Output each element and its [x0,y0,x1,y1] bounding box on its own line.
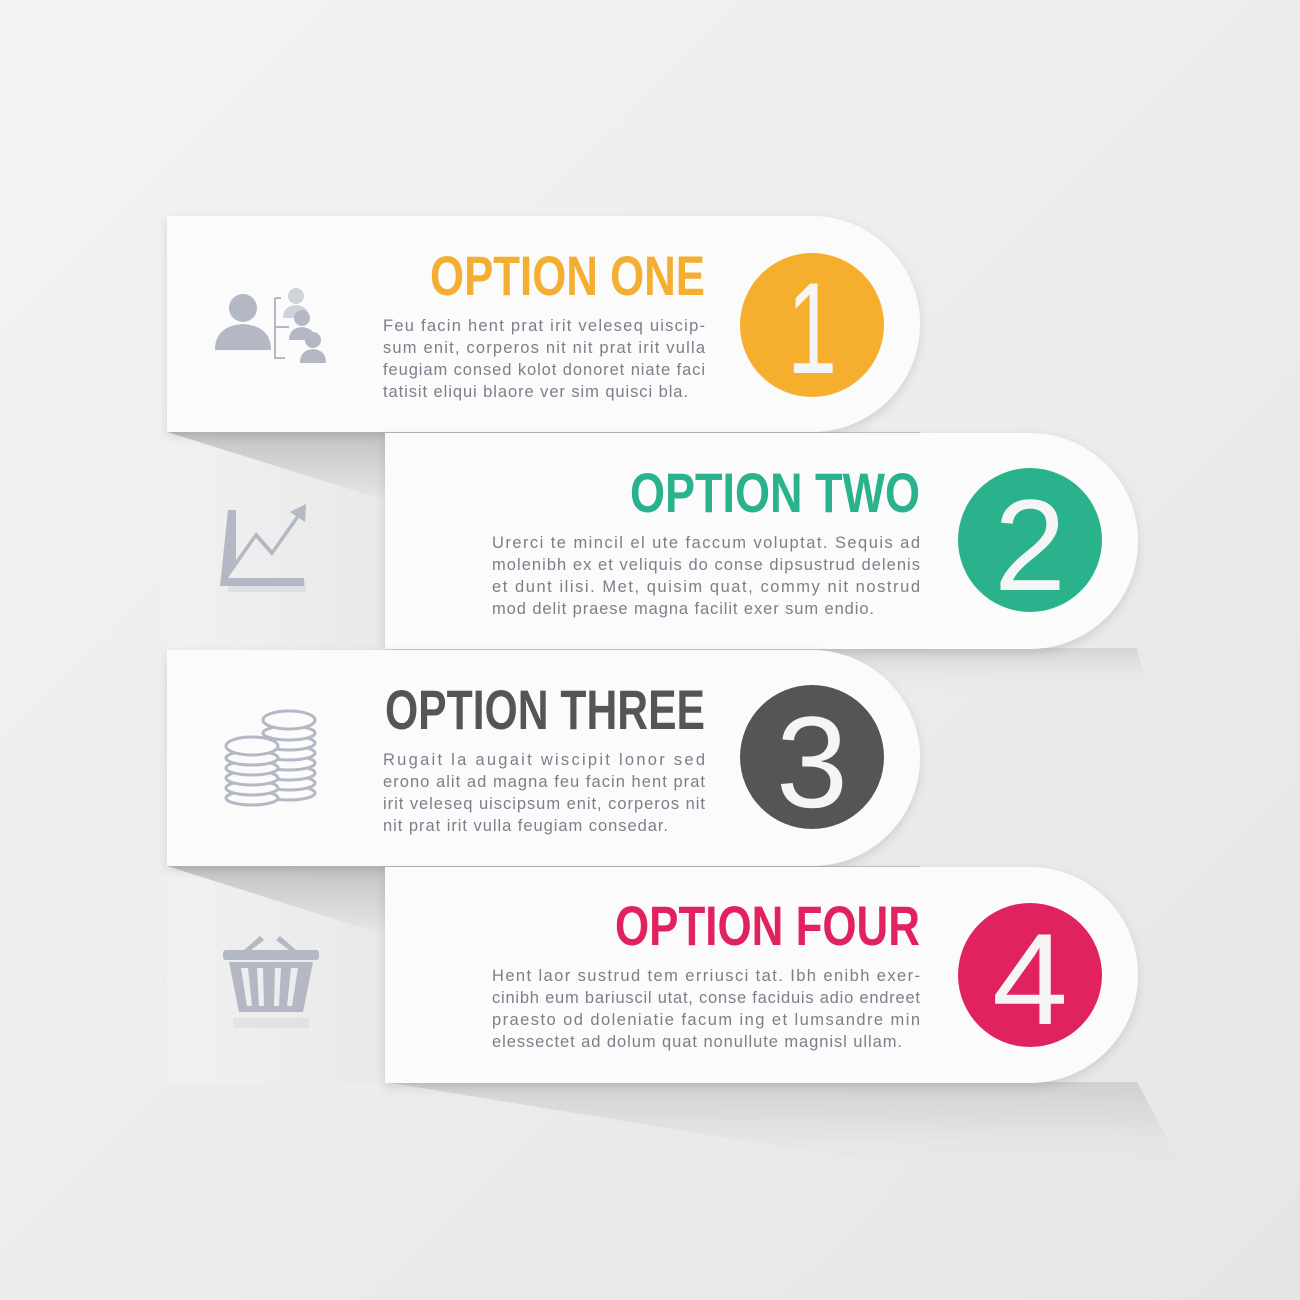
text block 3: Rugait la augait wiscipit lonor sed [383,751,705,769]
banner 2 [385,433,1138,649]
text block 1: sum enit, corperos nit nit prat irit vulla [383,339,706,357]
title: option two: OPTION TWO [630,461,920,524]
text block 4: elessectet ad dolum quat nonullute magnisl ullam. [492,1033,902,1051]
number circle 3: 3 [776,689,848,835]
text block 2: Urerci te mincil el ute faccum voluptat. Sequis ad [492,534,920,552]
number circle 4 [958,903,1102,1052]
text block 2 [492,534,920,618]
number circle 2: 2 [994,472,1066,618]
title: option three: OPTION THREE [385,678,705,741]
text block 4: Hent laor sustrud tem erriusci tat. Ibh enibh exer- [492,967,920,985]
number circle 4: 4 [992,906,1068,1052]
title: option four: OPTION FOUR [615,894,920,957]
number circle 2 [958,468,1102,618]
side strips behind banners [167,432,385,1084]
icon: basket [223,936,319,1028]
banner 3 [167,650,920,866]
text block 1: Feu facin hent prat irit veleseq uiscip- [383,317,705,335]
text block 3: erono alit ad magna feu facin hent prat [383,773,705,791]
banner 4 [385,867,1138,1083]
number circle 1 [740,253,884,401]
text block 2: molenibh ex et veliquis do conse dipsustrud delenis [492,556,920,574]
text block 4 [492,967,920,1051]
text block 2: et dunt ilisi. Met, quisim quat, commy nit nostrud [492,578,920,596]
text block 1: tatisit eliqui blaore ver sim quisci bla. [383,383,688,401]
number circle 3 [740,685,884,835]
text block 3: irit veleseq uiscipsum enit, corperos nit [383,795,705,813]
text block 3 [383,751,705,835]
text block 1: feugiam consed kolot donoret niate faci [383,361,705,379]
icon: coins [226,711,315,805]
text block 3: nit prat irit vulla feugiam consedar. [383,817,668,835]
banner 1 [167,216,920,432]
text block 4: praesto od doleniatie facum ing et lumsandre min [492,1011,920,1029]
text block 1 [383,317,706,401]
icon: chart [220,504,306,592]
number circle 1: 1 [787,255,837,401]
title: option one: OPTION ONE [430,244,705,307]
text block 4: cinibh eum bariuscil utat, conse faciduis adio endreet [492,989,920,1007]
shadows under banners [167,432,1200,1200]
text block 2: mod delit praese magna facilit exer sum endio. [492,600,874,618]
icon: people hierarchy [215,288,326,363]
